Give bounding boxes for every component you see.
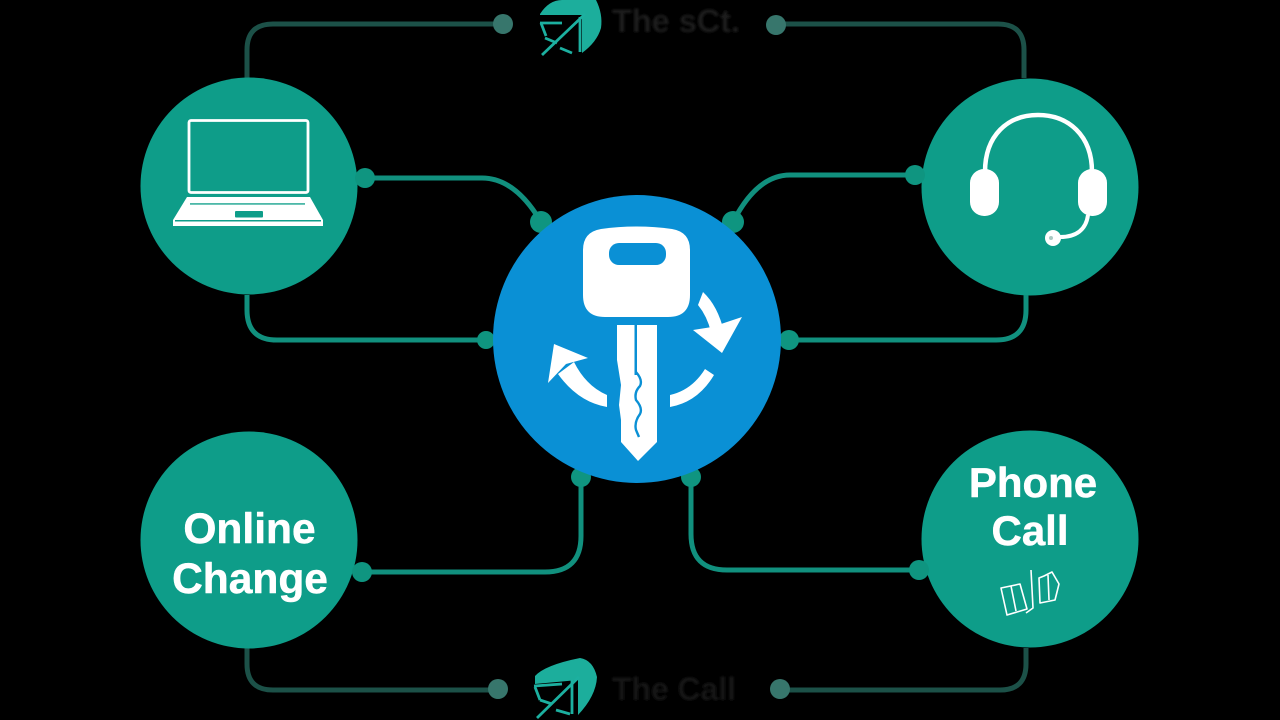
connector: headset to top logo (766, 15, 1024, 78)
connector: laptop to key lower (247, 295, 495, 349)
panel: central key (493, 195, 781, 483)
connector: online change to key (352, 467, 591, 582)
panel: phone call (922, 430, 1138, 648)
connector: phone call to bottom logo (770, 648, 1026, 699)
label: online change: Online (183, 506, 316, 553)
faded top label: The sCt. (612, 3, 740, 39)
icon: handwritten squiggle (1001, 570, 1059, 615)
label: online change: Change (172, 556, 328, 603)
label: phone call: Phone (969, 459, 1097, 506)
icon: rotation arrows (548, 292, 742, 407)
panel: online change (140, 432, 358, 648)
icon: laptop (173, 120, 323, 226)
faded bottom label: The Call (612, 671, 736, 707)
label: phone call: Call (991, 507, 1069, 554)
icon: headset (970, 115, 1107, 246)
logo: top emblem (540, 0, 601, 55)
connector: headset to key lower (779, 295, 1026, 350)
connector: phone call to key (681, 467, 929, 580)
connector: headset to key upper (722, 165, 925, 233)
logo: bottom emblem (534, 658, 597, 718)
icon: key (583, 226, 690, 461)
panel: headset (922, 78, 1138, 296)
connector: online change to bottom logo (247, 648, 508, 699)
connector: laptop to key upper (355, 168, 552, 233)
connector: laptop to top logo (247, 14, 513, 78)
panel: laptop (140, 78, 358, 294)
